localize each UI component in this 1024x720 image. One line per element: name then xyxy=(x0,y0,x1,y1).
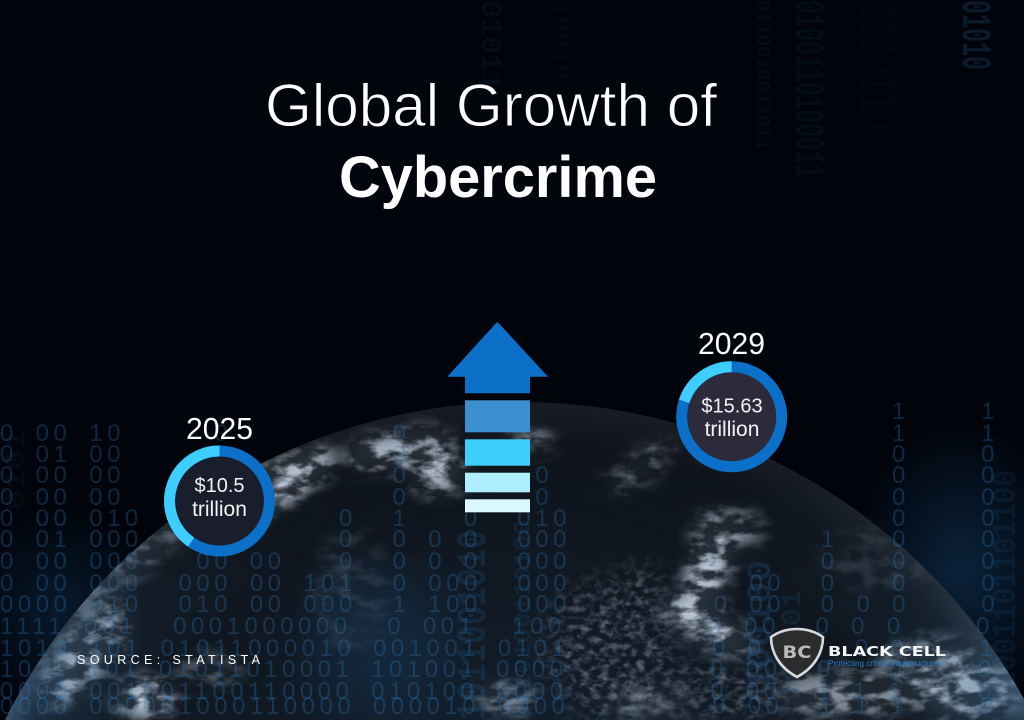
shield icon: BC xyxy=(782,643,812,663)
binary digit rain: 0 00 000 00 00 0 0 0 0 000 0 0 0 xyxy=(0,548,1017,575)
wordmark: BLACK CELL xyxy=(828,645,946,660)
rotated binary columns: 1011001010 xyxy=(450,530,498,720)
rotated binary columns: 0110010011011 xyxy=(750,0,773,150)
binary digit rain: 0 01 00 0 0 0 0 xyxy=(0,441,1017,468)
value xyxy=(701,396,763,441)
binary digit rain: 0 01 000 01 0 0 0 0 000 1 0 0 xyxy=(0,526,1017,553)
tagline: Protecting critical infrastructures xyxy=(828,658,942,668)
binary digit rain: 0 00 010 0 0 1 0 010 0 0 xyxy=(0,505,1017,532)
rotated binary columns: 0101 xyxy=(2,430,33,510)
value: $15.63 xyxy=(701,396,763,418)
value: $10.5 xyxy=(194,475,245,497)
data point: 2025 xyxy=(170,411,270,551)
donut ring xyxy=(682,367,782,467)
donut ring xyxy=(170,451,270,551)
value: trillion xyxy=(705,418,759,441)
rotated binary columns: 110101 xyxy=(778,590,809,700)
rotated binary columns: 01010 xyxy=(950,0,998,70)
binary digit rain: 0 00 000 000 00 101 0 000 000 00 0 0 0 xyxy=(0,570,1017,597)
binary digit rain: 1 1 xyxy=(0,398,1017,425)
bar 2 xyxy=(465,439,530,466)
logo: Black Cell xyxy=(771,629,946,677)
value xyxy=(192,475,247,521)
data point: 2029 xyxy=(682,326,782,467)
binary digit rain: 1111 001 0001000000 0 001 100 0 00 0 0 0 0 xyxy=(0,613,1012,640)
binary digit rain: 1011 101 01011010001 101001 0000 0 00 0 0 0 xyxy=(0,656,1014,683)
rotated binary columns: 01011 xyxy=(472,0,506,90)
title: Global Growth of xyxy=(265,72,717,139)
binary digit rain: 0 00 00 0 0 0 0 0 xyxy=(0,462,1017,489)
value: trillion xyxy=(192,498,247,521)
year label: 2029 xyxy=(698,326,765,361)
source note: SOURCE: STATISTA xyxy=(77,653,261,667)
bar 1 xyxy=(465,400,530,432)
rotated binary columns: 0100110100011 xyxy=(783,0,831,178)
rotated binary columns: 100100 xyxy=(743,560,781,690)
binary digit rain xyxy=(0,398,1017,720)
arrow head xyxy=(447,322,548,393)
bar 4 xyxy=(465,499,530,512)
year label: 2025 xyxy=(186,411,253,446)
background glow xyxy=(0,420,1024,720)
bar 3 xyxy=(465,473,530,492)
binary digit rain: 0 00 00 0 0 0 0 0 xyxy=(0,484,1017,511)
binary digit rain: 0000 010 010 00 000 1 100 000 0 00 0 0 0 0 xyxy=(0,591,1017,618)
rotated binary columns: 0110100110100 xyxy=(511,520,538,720)
binary digit rain: 0000 001001100110000 010100 0000 0 00 1 1 1 0 xyxy=(0,678,1014,705)
title: Cybercrime xyxy=(339,145,657,210)
title xyxy=(265,72,717,210)
earth globe xyxy=(0,400,1024,720)
rotated binary columns: 0100110 xyxy=(842,0,907,130)
binary digit rain: 1010 101 01011000010 001001 0101 0 0 0 0 1 xyxy=(0,635,1015,662)
shield icon xyxy=(771,629,823,677)
growth arrow xyxy=(447,322,548,512)
binary digit rain: 0 00 10 0 0 1 1 xyxy=(0,420,1017,447)
binary digit rain: 0000 000001000110000 000010 0000 0 00 1 1 1 0 xyxy=(0,693,1015,720)
rotated binary columns: 10010 xyxy=(543,0,577,80)
